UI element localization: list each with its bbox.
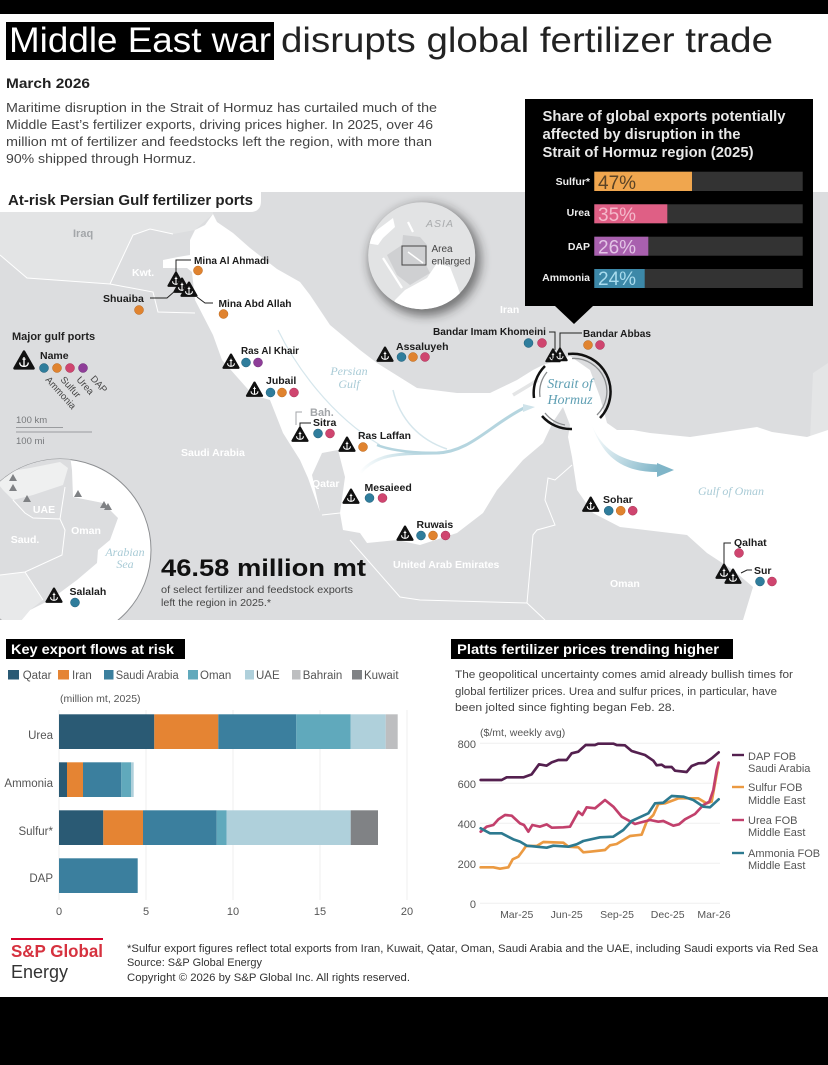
- port: Shuaiba: [103, 279, 190, 314]
- scale bar: 100 mi: [16, 436, 45, 447]
- y axis: 0: [470, 899, 476, 911]
- legend: Qatar: [23, 670, 52, 682]
- bar: ammonia 24%: 24%: [598, 269, 636, 290]
- y axis: 200: [458, 859, 476, 871]
- row: ammonia: [4, 762, 134, 797]
- heading: Platts prices: Platts fertilizer prices trending higher: [457, 641, 720, 657]
- title: disrupts global fertilizer trade: [281, 21, 773, 60]
- globe locator inset: enlarged: [432, 256, 470, 268]
- country labels: Kwt.: [132, 267, 154, 279]
- callout heading: [542, 108, 786, 161]
- row: sulfur: Sulfur*: [18, 826, 54, 838]
- unit label: ($/mt, weekly avg): [480, 727, 565, 739]
- lines: [481, 744, 719, 869]
- port: Bandar Imam Khomeini: [433, 326, 560, 361]
- port: Ras Al Khair: Ras Al Khair: [241, 345, 299, 357]
- port: Salalah: [46, 586, 106, 607]
- port: Qalhat: [716, 537, 767, 578]
- map heading: At-risk Persian Gulf fertilizer ports: [8, 193, 253, 209]
- water labels: [329, 364, 764, 498]
- line legend: Sulfur FOB: [748, 782, 802, 794]
- port: Assaluyeh: Assaluyeh: [396, 341, 449, 353]
- port: Ruwais: Ruwais: [416, 519, 453, 531]
- map legend: DAP: [88, 374, 109, 396]
- port: Mesaieed: [344, 482, 412, 503]
- big number callout: left the region in 2025.*: [161, 597, 271, 609]
- port: Sohar: Sohar: [603, 494, 633, 506]
- callout heading: affected by disruption in the: [542, 126, 740, 143]
- map legend: [12, 331, 109, 412]
- Strait of Hormuz callout: [534, 354, 611, 429]
- Strait of Hormuz callout: Strait of: [547, 377, 595, 392]
- y axis: 400: [458, 819, 476, 831]
- borders: [0, 229, 572, 620]
- x axis: Mar-25: [500, 909, 533, 921]
- flow arrow: into Hormuz: [278, 330, 535, 473]
- grid: [59, 710, 407, 900]
- legend: Iran: [72, 670, 92, 682]
- globe locator inset: [366, 202, 481, 330]
- intro text: million mt of fertilizer and feedstocks left the region, with more than: [6, 134, 432, 149]
- heading: key export flows: Key export flows at risk: [11, 641, 174, 657]
- port: Mina Al Ahmadi: [168, 255, 269, 286]
- country labels: Oman: [610, 578, 640, 590]
- date: March 2026: [6, 75, 90, 91]
- x axis: Mar-26: [697, 909, 731, 921]
- y axis: 600: [458, 779, 476, 791]
- bar: DAP 26%: DAP: [568, 241, 590, 253]
- footnotes: Copyright © 2026 by S&P Global Inc. All rights reserved.: [127, 972, 410, 984]
- port: Bandar Imam Khomeini: Bandar Imam Khomeini: [433, 326, 546, 338]
- lighter land: Pakistan: [810, 363, 828, 440]
- big number callout: [161, 555, 366, 609]
- bar: DAP 26%: [568, 237, 803, 258]
- country labels: Qatar: [312, 478, 339, 490]
- top black band: [0, 0, 828, 14]
- logo: S&P Global Energy: Energy: [11, 962, 68, 982]
- Oman locator inset: UAE: [33, 504, 55, 516]
- port: Sitra: Sitra: [313, 417, 337, 429]
- x axis: [56, 906, 413, 918]
- intro text: [6, 100, 437, 166]
- line legend: DAP FOB: [748, 751, 796, 763]
- bar: sulfur 47%: [556, 172, 803, 194]
- line legend: Middle East: [748, 795, 805, 807]
- scale bar: 100 km: [16, 415, 47, 426]
- line legend: Middle East: [748, 860, 805, 872]
- line legend: Urea FOB: [748, 815, 798, 827]
- logo: S&P Global Energy: S&P Global: [11, 941, 103, 961]
- big number callout: of select fertilizer and feedstock exports: [161, 584, 353, 596]
- Oman locator inset: Oman: [71, 525, 101, 537]
- country labels: Bah.: [310, 407, 334, 419]
- line: ammonia: [481, 796, 719, 848]
- Oman locator inset: [0, 458, 152, 620]
- legend: Kuwait: [364, 670, 399, 682]
- port: Ruwais: [398, 519, 453, 540]
- intro text: Maritime disruption in the Strait of Hormuz has curtailed much of the: [6, 100, 437, 115]
- Oman locator inset: Sea: [116, 557, 134, 571]
- title: Middle East war: [9, 21, 271, 60]
- port: Sur: Sur: [754, 565, 772, 577]
- grid: [480, 743, 720, 903]
- bar: ammonia 24%: Ammonia: [542, 272, 590, 284]
- row: urea: [28, 714, 398, 749]
- port: Sohar: [583, 494, 637, 515]
- water labels: Gulf of Oman: [698, 484, 764, 498]
- port: Assaluyeh: [378, 341, 449, 362]
- intro text: 90% shipped through Hormuz.: [6, 151, 196, 166]
- port: Jubail: [247, 375, 298, 397]
- title: [6, 21, 773, 60]
- callout heading: Share of global exports potentially: [542, 108, 786, 125]
- footnotes: *Sulfur export figures reflect total exports from Iran, Kuwait, Qatar, Oman, Saudi Arabia and the UAE, including Saudi exports via Red Sea: [127, 943, 818, 955]
- map legend: Ammonia: [43, 375, 78, 412]
- row: urea: Urea: [28, 730, 54, 742]
- line: DAP: [481, 744, 719, 780]
- text: prices commentary: been jolted since fighting began Feb. 28.: [455, 702, 675, 714]
- panel: line chart: [458, 727, 820, 921]
- row: sulfur: [18, 810, 378, 845]
- bar: urea 35%: Urea: [567, 207, 590, 219]
- intro text: Middle East’s fertilizer exports, driving prices higher. In 2025, over 46: [6, 117, 433, 132]
- port: Mina Al Ahmadi: Mina Al Ahmadi: [194, 255, 269, 267]
- port: Shuaiba: Shuaiba: [103, 293, 144, 305]
- port: Jubail: Jubail: [266, 375, 296, 387]
- unit label: (million mt, 2025): [60, 693, 141, 705]
- line: urea: [481, 763, 719, 832]
- map legend: Urea: [74, 375, 96, 398]
- map heading: [0, 190, 261, 212]
- Qeshm island: [513, 380, 538, 395]
- y axis: [458, 739, 476, 911]
- text: prices commentary: [455, 669, 793, 714]
- footnotes: [127, 943, 818, 984]
- bar: urea 35%: 35%: [598, 205, 636, 226]
- port: Mina Abd Allah: [182, 283, 292, 318]
- port: Sitra: [292, 417, 337, 441]
- panel: share of exports callout: [525, 99, 813, 324]
- bar: ammonia 24%: [542, 269, 803, 290]
- country labels: Iraq: [73, 228, 93, 240]
- port: Bandar Abbas: Bandar Abbas: [583, 328, 651, 340]
- x axis: 15: [314, 906, 326, 918]
- x axis: 5: [143, 906, 149, 918]
- map legend: Name: [40, 350, 69, 362]
- port: Mina Abd Allah: Mina Abd Allah: [218, 298, 292, 310]
- row: ammonia: Ammonia: [4, 778, 54, 790]
- logo: S&P Global Energy: [11, 938, 103, 982]
- text: prices commentary: global fertilizer prices. Urea and sulfur prices, in particular, have: [455, 686, 777, 698]
- x axis: Dec-25: [651, 909, 685, 921]
- legend: UAE: [256, 670, 280, 682]
- bar: urea 35%: [567, 204, 803, 226]
- Oman locator inset: Arabian: [104, 545, 145, 559]
- port: Ras Laffan: Ras Laffan: [358, 430, 411, 442]
- x axis: 0: [56, 906, 62, 918]
- land: [0, 192, 828, 620]
- bar: sulfur 47%: Sulfur*: [556, 176, 591, 188]
- panel: stacked bar chart: [4, 670, 413, 918]
- x axis: Sep-25: [600, 909, 634, 921]
- port: Qalhat: Qalhat: [734, 537, 767, 549]
- water labels: Gulf: [338, 377, 361, 391]
- port: Bandar Abbas: [553, 328, 651, 360]
- footnotes: Source: S&P Global Energy: [127, 957, 263, 969]
- legend: Bahrain: [303, 670, 342, 682]
- big number callout: 46.58 million mt: [161, 555, 366, 582]
- flow arrow: to Gulf of Oman: [594, 432, 674, 477]
- country labels: United Arab Emirates: [393, 559, 500, 571]
- line legend: Saudi Arabia: [748, 763, 811, 775]
- row: DAP: [29, 858, 138, 893]
- port: Salalah: Salalah: [70, 586, 106, 598]
- globe locator inset: ASIA: [425, 218, 454, 230]
- globe locator inset: Area: [432, 244, 453, 255]
- x axis: Jun-25: [551, 909, 583, 921]
- row: DAP: DAP: [29, 873, 53, 885]
- text: prices commentary: The geopolitical uncertainty comes amid already bullish times for: [455, 669, 793, 681]
- map legend: Sulfur: [58, 375, 83, 400]
- legend: Oman: [200, 670, 231, 682]
- bottom black band: [0, 997, 828, 1065]
- y axis: 800: [458, 739, 476, 751]
- legend: Saudi Arabia: [116, 670, 179, 682]
- callout heading: Strait of Hormuz region (2025): [542, 144, 754, 161]
- line: sulfur: [481, 763, 719, 869]
- sea: [163, 214, 828, 620]
- line legend: Ammonia FOB: [748, 848, 820, 860]
- country labels: Iran: [500, 304, 519, 316]
- legend: [8, 670, 399, 682]
- country labels: Saudi Arabia: [181, 447, 245, 459]
- port: Sur: [726, 565, 776, 586]
- bar: sulfur 47%: 47%: [598, 173, 636, 194]
- Oman locator inset: Saud.: [11, 534, 39, 546]
- x axis: [500, 909, 731, 921]
- panel: map: [0, 192, 828, 641]
- Strait of Hormuz callout: Hormuz: [546, 393, 593, 408]
- port: Ras Al Khair: [224, 345, 299, 368]
- map legend: Major gulf ports: [12, 331, 95, 343]
- bar: DAP 26%: 26%: [598, 238, 636, 258]
- port: Ras Laffan: [340, 430, 411, 452]
- scale bar: [16, 416, 92, 444]
- line legend: [732, 751, 820, 872]
- country labels: [73, 228, 640, 590]
- lighter land: Iraq: [0, 192, 213, 284]
- line legend: Middle East: [748, 827, 805, 839]
- x axis: 20: [401, 906, 413, 918]
- port: Mesaieed: Mesaieed: [364, 482, 412, 494]
- x axis: 10: [227, 906, 239, 918]
- water labels: Persian: [329, 364, 368, 378]
